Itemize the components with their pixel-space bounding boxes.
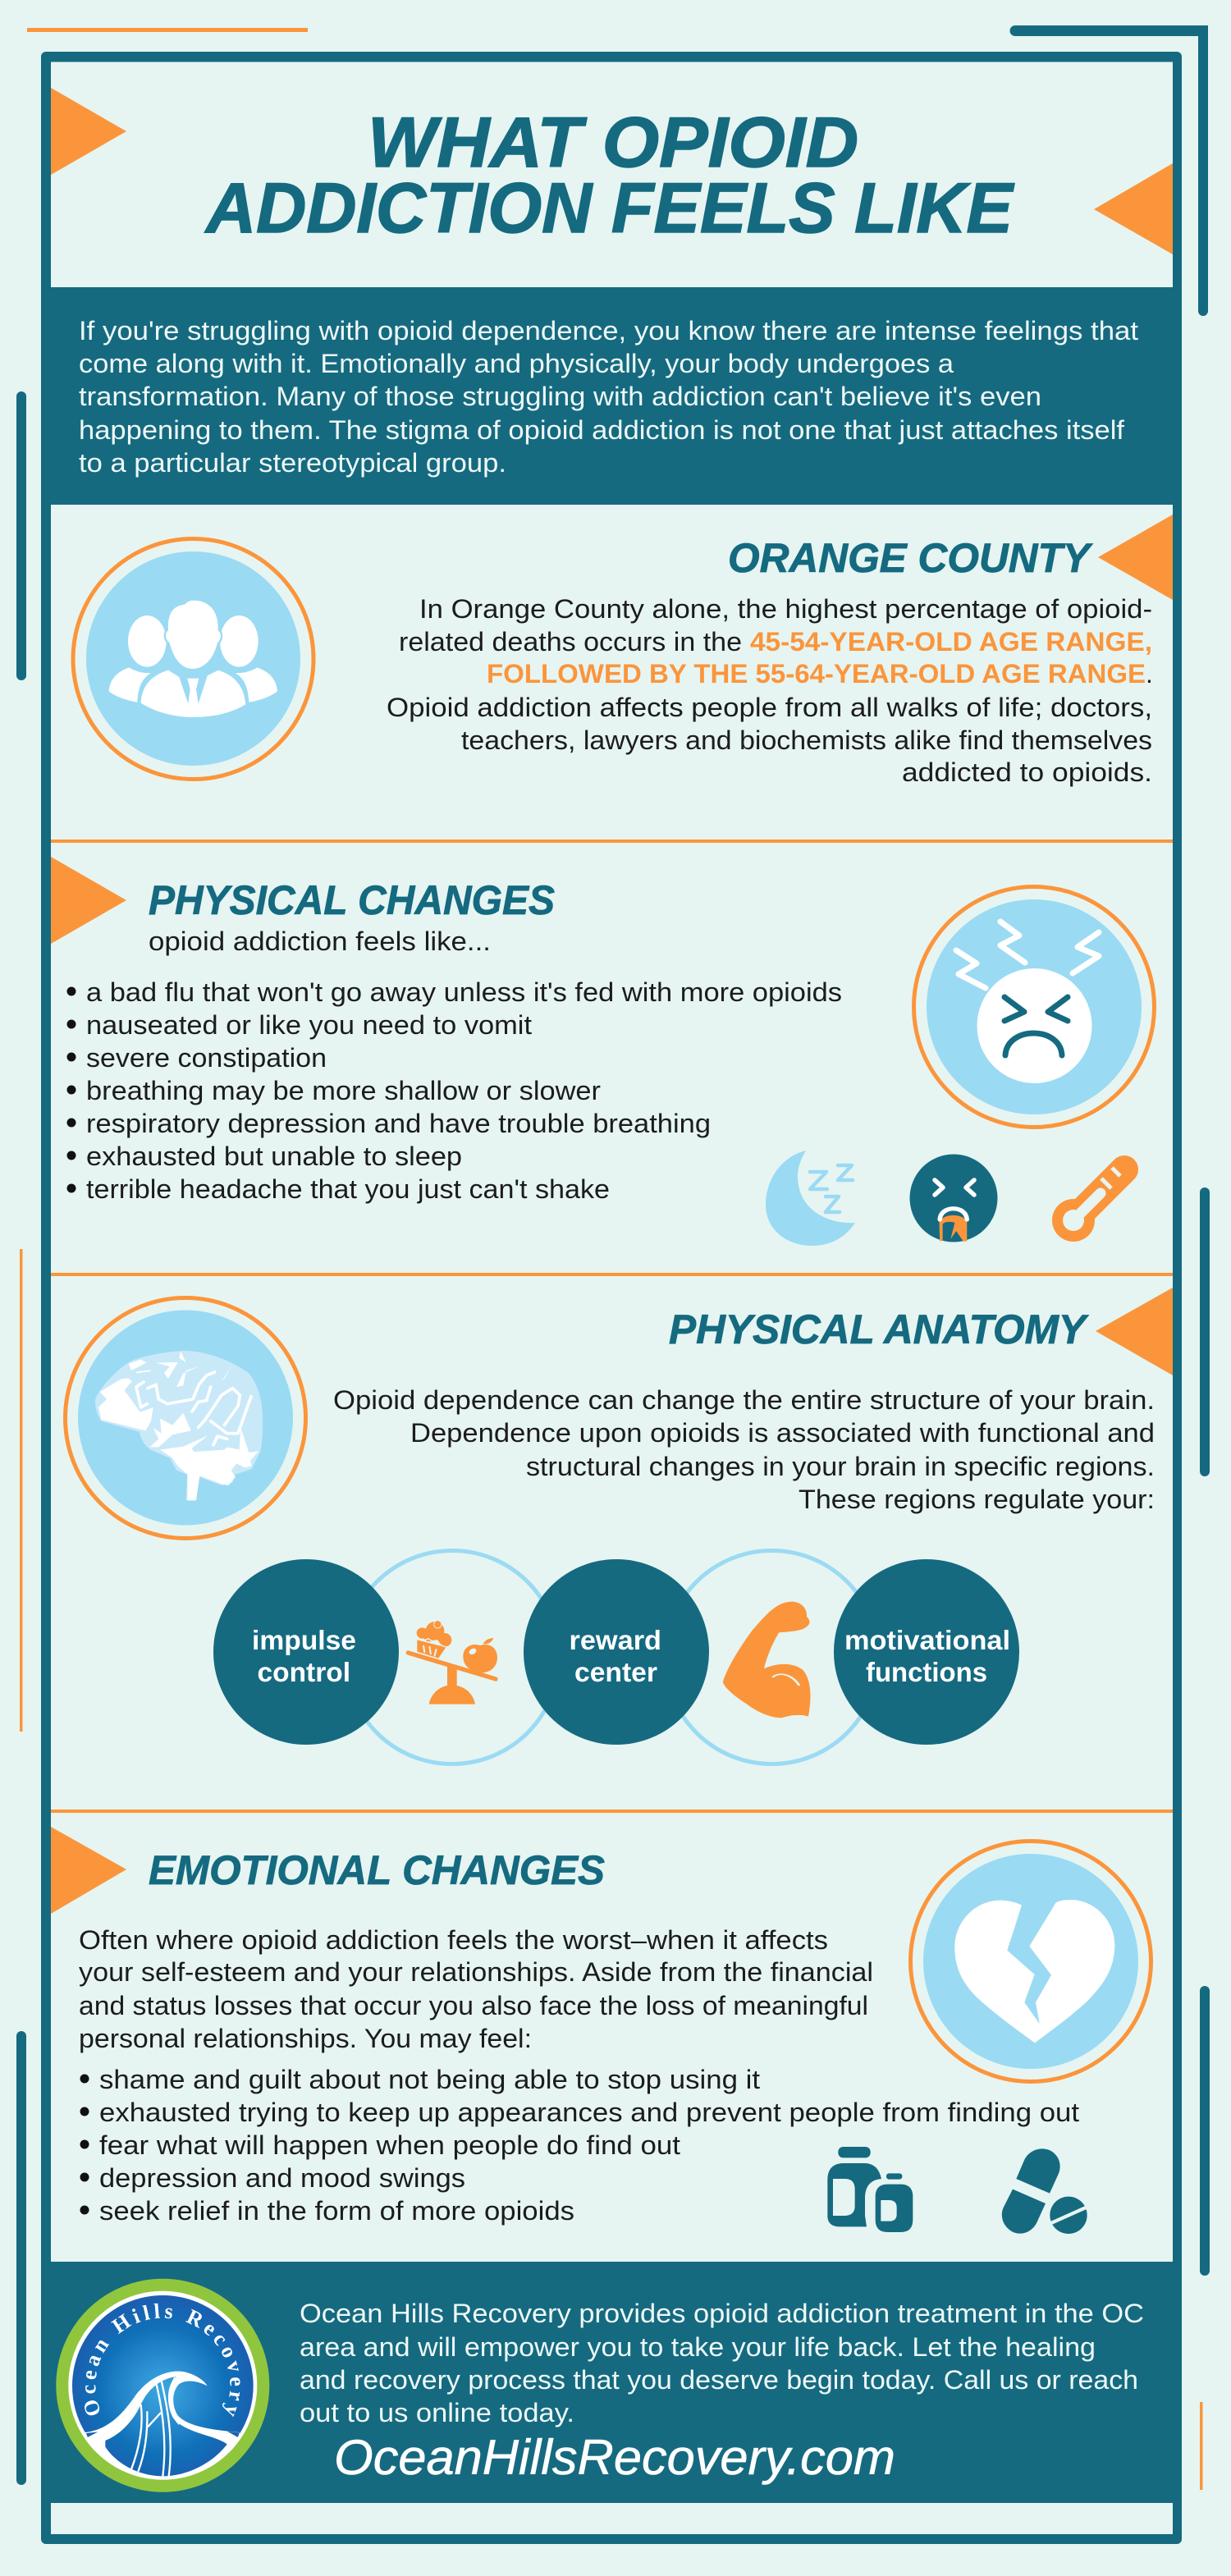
circle: motivational functions: functions [866,1657,987,1687]
bullet list: symptoms: a bad flu that won't go away unless it's fed with more opioids [86,977,842,1007]
intro text: come along with it. Emotionally and physically, your body undergoes a [79,349,954,378]
text: orange county: 45-54-YEAR-OLD AGE RANGE, [750,627,1152,657]
triangle: physical anatomy [1096,1288,1173,1375]
intro text: happening to them. The stigma of opioid addiction is not one that just attaches itself [79,415,1124,445]
bullet list: symptoms: respiratory depression and have trouble breathing [86,1109,711,1138]
circle: impulse control [213,1559,399,1745]
icon: pill bottles [827,2147,913,2232]
text: emotional changes: and status losses that occur you also face the loss of meaningful [79,1991,868,2020]
heading: emotional changes: EMOTIONAL CHANGES [149,1847,605,1893]
triangle: physical changes [51,857,126,944]
icon: scale with muffin and apple [408,1621,497,1704]
panel: physical anatomy [51,1276,1173,1810]
intro text: If you're struggling with opioid dependence, you know there are intense feelings that [79,316,1138,345]
subheading: opioid addiction feels like... [149,927,491,956]
bullet list: feelings: exhausted trying to keep up appearances and prevent people from finding out [99,2098,1079,2127]
circle: motivational functions: motivational [844,1625,1010,1655]
text: physical anatomy: These regions regulate your: [799,1485,1155,1514]
panel: orange county [51,505,1173,840]
icon: moon [766,1151,855,1246]
text: footer: and recovery process that you deserve begin today. Call us or reach [300,2365,1138,2395]
text: emotional changes: your self-esteem and your relationships. Aside from the financial [79,1957,873,1987]
text: physical anatomy: Opioid dependence can change the entire structure of your brain. [333,1385,1155,1415]
text: footer: Ocean Hills Recovery provides opioid addiction treatment in the OC [300,2299,1144,2328]
text: orange county: In Orange County alone, the highest percentage of opioid- [419,594,1152,624]
intro text: transformation. Many of those struggling with addiction can't believe it's even [79,382,1041,411]
title: WHAT OPIOID [368,103,858,182]
intro text: to a particular stereotypical group. [79,448,506,478]
icon: thermometer [1052,1168,1124,1242]
text: emotional changes [79,1925,873,2053]
text: orange county: Opioid addiction affects people from all walks of life; doctors, [387,693,1152,722]
panel: physical changes [51,843,1173,1273]
circle: reward center: reward [570,1625,661,1655]
intro text [79,316,1138,478]
triangle: title right [1094,163,1173,254]
text: emotional changes: personal relationships. You may feel: [79,2024,532,2053]
text: footer: area and will empower you to take your life back. Let the healing [300,2332,1096,2362]
text: orange county [387,594,1153,787]
triangle: orange county [1098,515,1173,600]
text: physical anatomy: Dependence upon opioids is associated with functional and [410,1418,1155,1448]
heading: orange county: ORANGE COUNTY [728,535,1094,581]
bullet list: symptoms: exhausted but unable to sleep [86,1142,462,1171]
bullet list: feelings: seek relief in the form of more opioids [99,2196,574,2226]
text: orange county: FOLLOWED BY THE 55-64-YEAR-OLD AGE RANGE [487,659,1146,689]
panel: intro [51,287,1173,505]
icon: broken heart [911,1842,1151,2081]
text: emotional changes: Often where opioid addiction feels the worst–when it affects [79,1925,828,1955]
icon: headache face [914,886,1154,1128]
triangle: emotional changes [51,1827,126,1914]
title [204,103,1015,248]
logo: Ocean Hills Recovery [56,2278,269,2492]
bullet list: feelings: depression and mood swings [99,2163,465,2193]
panel: title [51,62,1173,287]
circle: reward center [524,1559,709,1745]
bullet list: symptoms [67,977,842,1204]
heading: physical anatomy: PHYSICAL ANATOMY [669,1306,1090,1352]
circle: reward center: center [574,1657,657,1687]
icon: nausea face [909,1154,998,1242]
text: physical anatomy [333,1385,1155,1514]
text: orange county: addicted to opioids. [902,757,1152,787]
bullet list: feelings [80,2065,1079,2226]
text: footer: out to us online today. [300,2398,574,2427]
bullet list: symptoms: severe constipation [86,1043,327,1073]
panel: footer [56,2278,1144,2492]
bullet list: symptoms: breathing may be more shallow or slower [86,1076,601,1105]
title: ADDICTION FEELS LIKE [204,169,1015,248]
logo: Ocean Hills Recovery: Ocean Hills Recovery [85,2303,240,2418]
panel: emotional changes [51,1813,1173,2262]
bullet list: feelings: shame and guilt about not being able to stop using it [99,2065,760,2094]
circle: impulse control: impulse [252,1625,356,1655]
text: physical anatomy: structural changes in your brain in specific regions. [526,1452,1155,1481]
text: orange county: related deaths occurs in the [399,627,742,657]
bullet list: symptoms: terrible headache that you just can't shake [86,1174,610,1204]
bullet list: symptoms: nauseated or like you need to vomit [86,1010,532,1040]
icon: pills [1002,2148,1087,2234]
icon: flexed arm [723,1602,810,1718]
icon: people [73,538,313,780]
circle: impulse control: control [258,1657,350,1687]
bullet list: feelings: fear what will happen when people do find out [99,2130,680,2160]
text: orange county: teachers, lawyers and biochemists alike find themselves [461,725,1152,755]
heading: physical changes: PHYSICAL CHANGES [149,877,555,923]
triangle: title left [51,88,126,175]
circle: motivational functions [834,1559,1019,1745]
website url: OceanHillsRecovery.com [334,2430,895,2485]
text: orange county: . [1146,659,1153,689]
text: footer [300,2299,1144,2427]
icon: brain [66,1298,305,1538]
diagram: brain regions [213,1551,1019,1764]
